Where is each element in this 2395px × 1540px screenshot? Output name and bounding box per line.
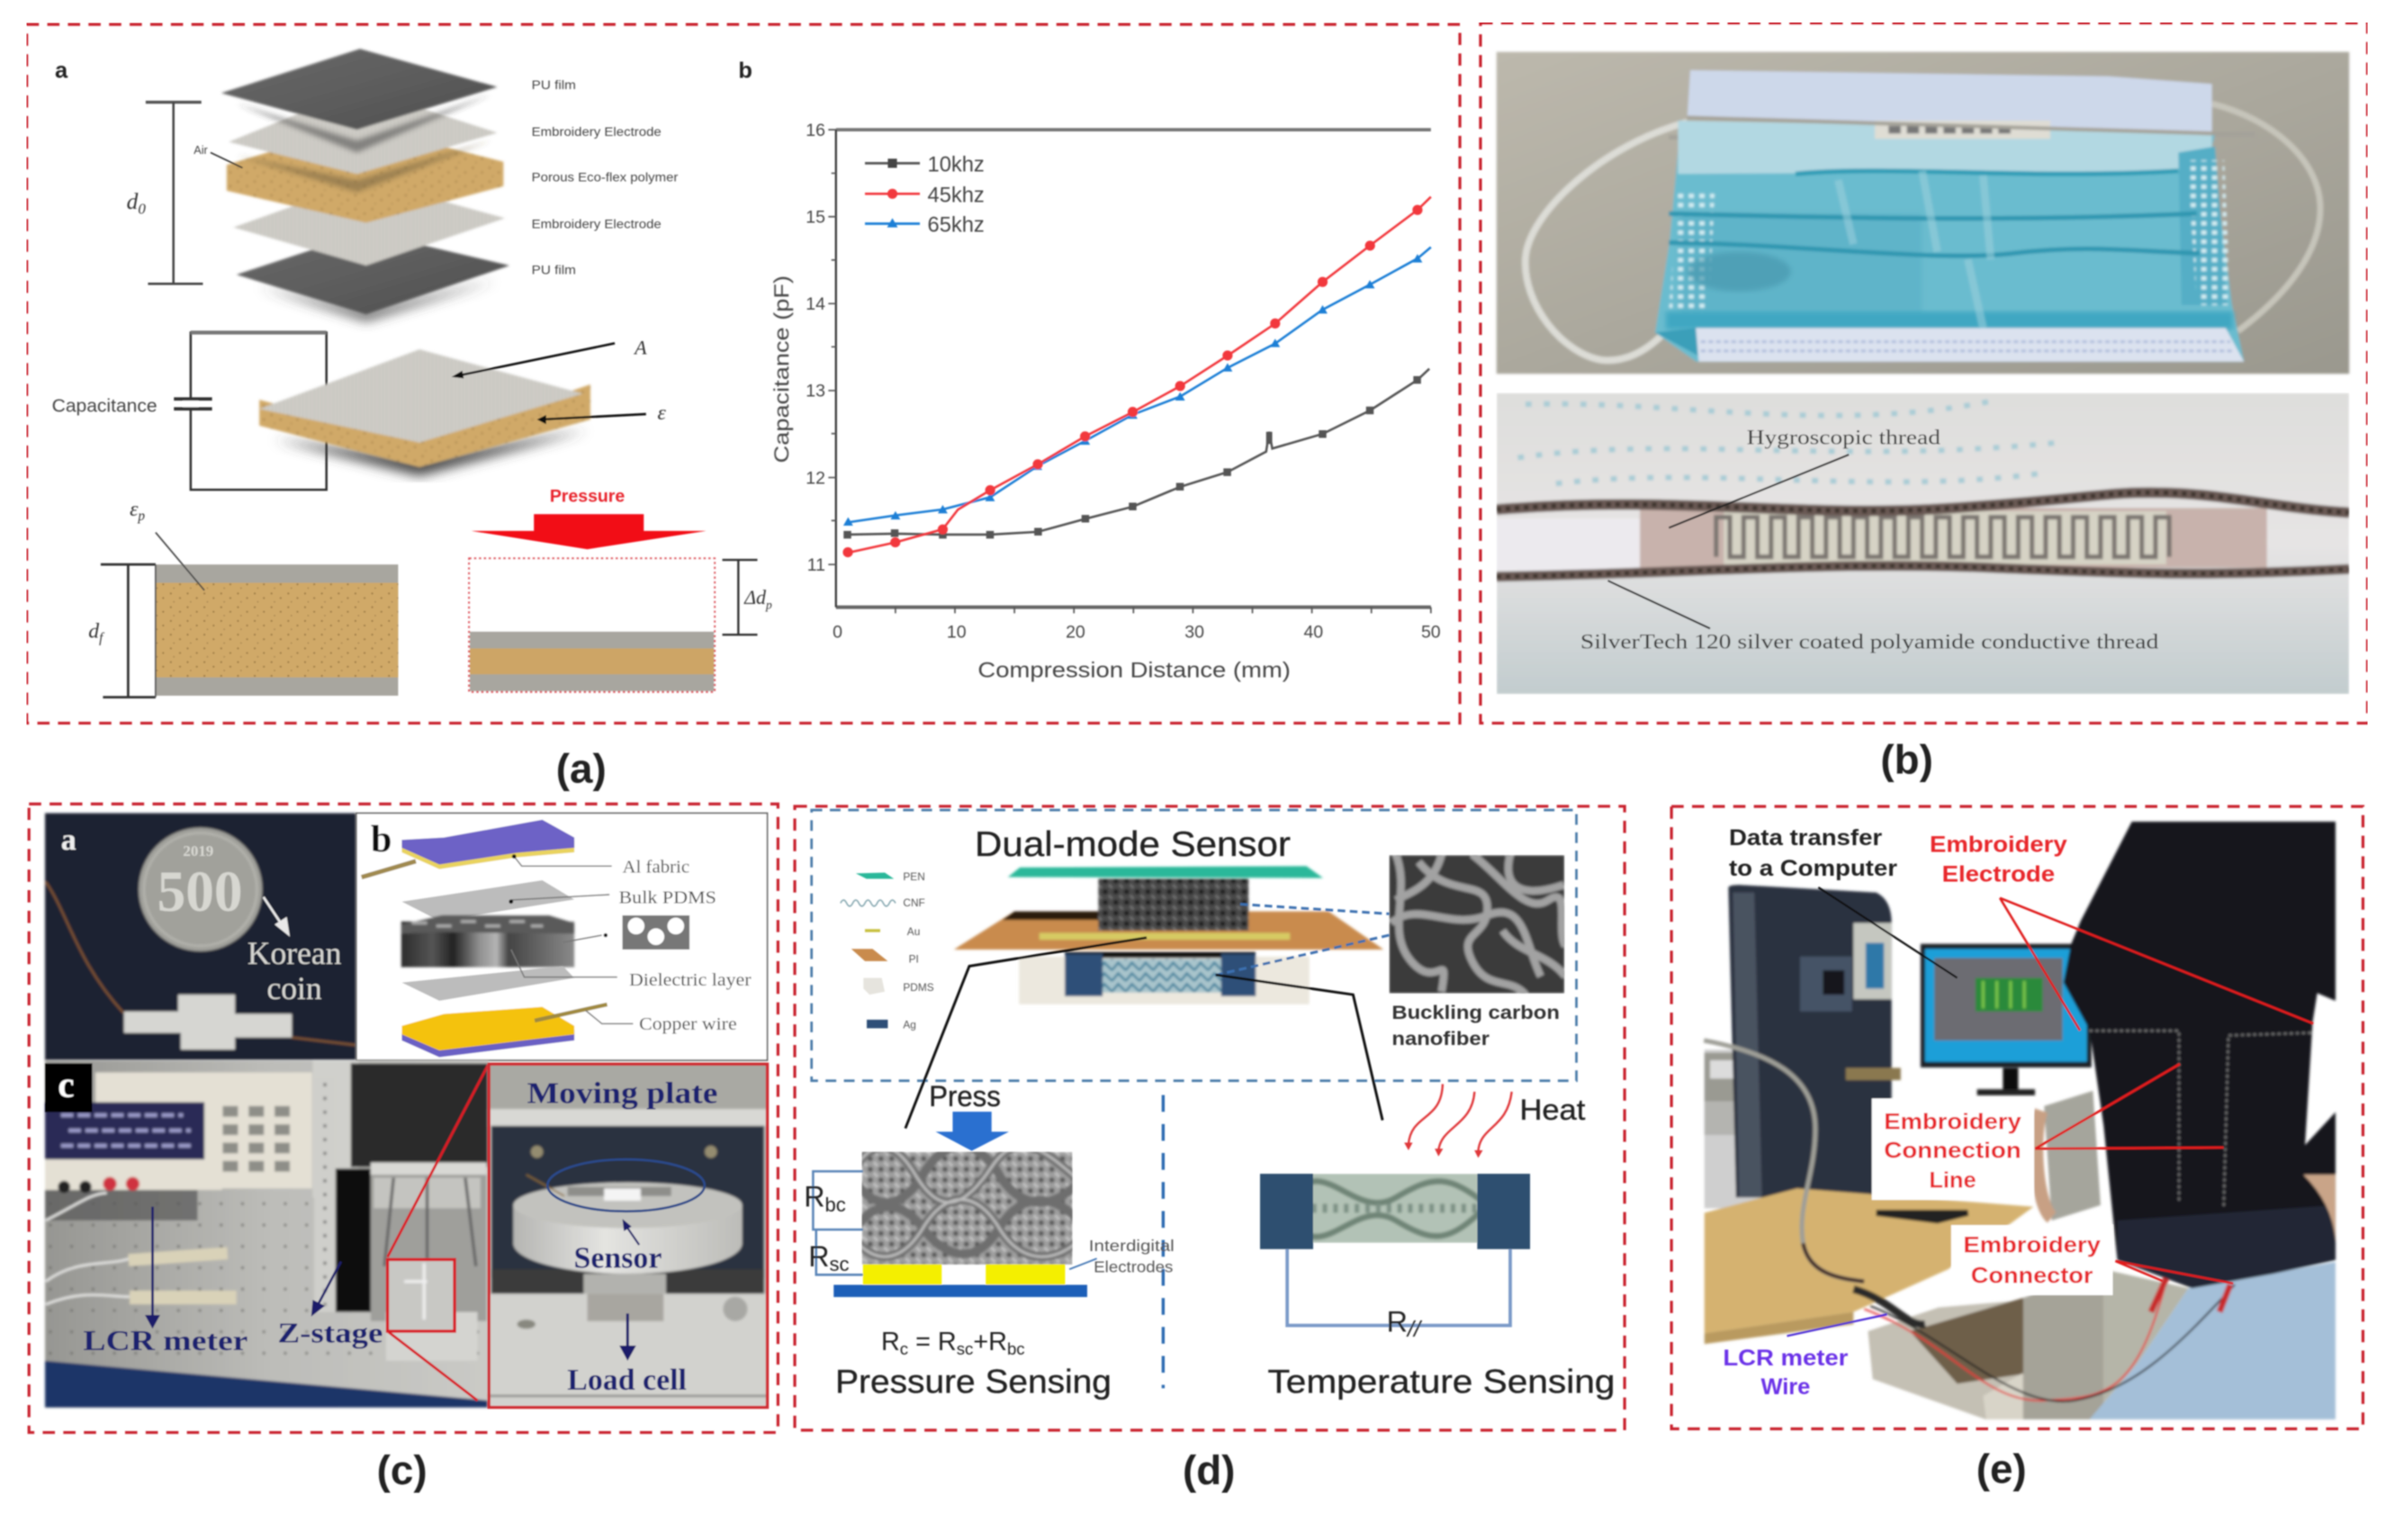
x axis tick labels — [833, 623, 1441, 643]
x axis tick labels: 0 — [833, 623, 842, 643]
icon: porous inset — [623, 915, 689, 950]
diagram: uncompressed layers: d — [88, 620, 99, 644]
photo: embroidered thread close-up — [1497, 392, 2349, 694]
photo: test setup and subject — [1704, 822, 2336, 1419]
diagram: temperature-sensing element — [1260, 1173, 1530, 1326]
label: interdigital electrodes — [1069, 1237, 1175, 1276]
label: embroidery electrode lower: Embroidery Electrode — [532, 217, 662, 230]
x axis tick labels: 30 — [1184, 623, 1204, 643]
label: sensor with arrow: Sensor — [573, 1242, 662, 1275]
label: Z-stage with arrow — [277, 1262, 383, 1349]
legend: materials: Ag — [903, 1018, 916, 1031]
x axis tick labels: 20 — [1066, 623, 1085, 643]
caption: (e): (e) — [1976, 1445, 2027, 1491]
label: sensor with arrow — [573, 1219, 662, 1275]
connectors: zoom lines — [905, 938, 1382, 1129]
coin text: 2019 — [183, 842, 213, 860]
x axis tick labels: 10 — [947, 623, 967, 643]
label box: c: c — [58, 1065, 74, 1105]
callout: hygroscopic thread: Hygroscopic thread — [1747, 426, 1941, 448]
panel: (d) dual-mode sensor — [795, 806, 1625, 1430]
arrow: area A — [452, 336, 647, 378]
diagram: uncompressed layers: ε — [130, 498, 138, 521]
y axis tick labels: 16 — [806, 121, 825, 140]
icon: capacitor block — [259, 349, 590, 476]
label: load cell with arrow: Load cell — [567, 1364, 687, 1397]
photo inset: load cell and moving plate — [488, 1063, 768, 1408]
bracket: d0 distance: 0 — [138, 200, 146, 217]
label: PU film: PU film — [532, 78, 576, 92]
axis title: capacitance: Capacitance (pF) — [770, 275, 793, 463]
coin text: 500 — [158, 860, 242, 923]
legend: materials: PDMS — [903, 981, 934, 994]
label: heat: Heat — [1519, 1094, 1585, 1126]
label: R parallel: // — [1406, 1317, 1423, 1342]
label: porous polymer: Porous Eco-flex polymer — [532, 171, 679, 185]
circuit: capacitor loop — [52, 333, 327, 490]
arrow: pressure — [472, 487, 707, 549]
caption: (d): (d) — [1183, 1447, 1235, 1493]
chart legend: 45khz — [928, 185, 985, 208]
label: moving plate: Moving plate — [527, 1076, 717, 1110]
label: interdigital electrodes: Electrodes — [1094, 1258, 1173, 1276]
label: embroidery electrode upper: Embroidery Electrode — [532, 125, 662, 139]
arrow: coin pointer — [264, 897, 290, 937]
callout: embroidery connector: Connector — [1971, 1263, 2093, 1288]
photo: mask — [1497, 52, 2349, 374]
label: LCR meter with arrow — [83, 1207, 248, 1356]
legend: materials — [841, 870, 934, 1031]
circuit: contact resistance leads — [813, 1171, 863, 1274]
connectors: blue dashes — [1212, 905, 1389, 976]
chart legend: 10khz — [928, 154, 985, 177]
callout: embroidery electrode: Electrode — [1942, 862, 2055, 887]
line chart: capacitance vs compression distance — [770, 121, 1441, 683]
label: air with leader — [194, 143, 242, 167]
label: R bc: R — [804, 1181, 824, 1213]
label: R parallel: R — [1387, 1306, 1408, 1338]
diagram: compressed layers — [469, 558, 772, 692]
label: R sc: sc — [830, 1253, 850, 1275]
label: buckling carbon nanofiber: Buckling carbon — [1391, 1003, 1560, 1023]
diagram: compressed layers: p — [765, 598, 772, 611]
photo: carbon nanofiber SEM — [1389, 854, 1565, 995]
label: LCR meter with arrow: LCR meter — [83, 1324, 248, 1356]
x axis tick labels: 50 — [1421, 623, 1441, 643]
callout: LCR meter wire: LCR meter — [1723, 1346, 1848, 1371]
label: buckling carbon nanofiber — [1391, 1003, 1560, 1049]
chart legend: 65khz — [928, 214, 985, 238]
caption: (a): (a) — [556, 746, 607, 792]
y axis tick labels — [806, 121, 825, 575]
callout: data transfer — [1729, 825, 1958, 977]
y axis tick labels: 11 — [807, 555, 825, 575]
formula: contact resistance: c — [900, 1339, 908, 1358]
label: Korean coin: coin — [266, 970, 322, 1006]
callout: LCR meter wire — [1723, 1314, 1886, 1400]
bracket: d0 distance — [127, 103, 203, 284]
arrow: permittivity — [537, 401, 667, 425]
callout: embroidery electrode — [1930, 833, 2313, 1031]
photo: sensor and Korean coin — [45, 813, 356, 1060]
y axis tick labels: 15 — [806, 208, 825, 228]
x axis tick labels: 40 — [1303, 623, 1323, 643]
label: buckling carbon nanofiber: nanofiber — [1391, 1029, 1490, 1049]
label: air with leader: Air — [194, 143, 209, 157]
formula: contact resistance: +R — [973, 1328, 1007, 1356]
arrow: area A: A — [633, 336, 647, 358]
panel: (c) pressure sensor measurement setup — [29, 804, 778, 1433]
label: pressure sensing: Pressure Sensing — [835, 1362, 1112, 1400]
title: dual-mode sensor: Dual-mode Sensor — [975, 825, 1291, 864]
formula: contact resistance: = R — [908, 1328, 957, 1356]
bracket: d0 distance: d — [127, 189, 138, 214]
label: load cell with arrow — [567, 1313, 687, 1397]
label: press: Press — [929, 1080, 1001, 1112]
legend: materials: PEN — [903, 870, 925, 883]
series: 10 kHz — [843, 369, 1429, 538]
callout: embroidery connection line: Line — [1929, 1168, 1976, 1193]
panel: (a) capacitive sensor structure and chart — [27, 24, 1460, 723]
icon: exploded layer stack — [221, 49, 509, 320]
label: R sc: R — [808, 1240, 830, 1273]
formula: contact resistance: bc — [1007, 1339, 1025, 1358]
arrows: heat — [1409, 1084, 1512, 1152]
diagram: uncompressed layers: f — [99, 631, 104, 646]
label: Korean coin: Korean — [248, 935, 342, 971]
label box: c — [45, 1063, 93, 1112]
panel: (b) smart mask with embroidered sensor — [1481, 23, 2367, 723]
formula: contact resistance: sc — [957, 1339, 973, 1358]
arrow: pressure: Pressure — [550, 487, 625, 507]
label: Copper wire: Copper wire — [639, 1014, 737, 1034]
diagram: uncompressed layers: p — [137, 509, 145, 524]
arrow: permittivity: ε — [658, 401, 667, 425]
callout: embroidery connection line: Connection — [1884, 1138, 2021, 1163]
series: 45 kHz — [842, 197, 1431, 557]
callout: data transfer: Data transfer — [1729, 825, 1882, 851]
label: sub-panel b: b — [738, 58, 752, 83]
diagram: sensor stack — [954, 866, 1383, 1004]
circuit: capacitor loop: Capacitance — [52, 397, 158, 417]
callout: embroidery connector — [1951, 1225, 2233, 1295]
diagram: compressed layers: Δd — [744, 586, 766, 608]
caption: (c): (c) — [377, 1447, 428, 1493]
diagram: pressure-sensing carbon nanofiber — [860, 1150, 1073, 1265]
callout: embroidery connection line — [1872, 1064, 2224, 1200]
y axis tick labels: 13 — [806, 382, 825, 401]
legend: materials: Au — [907, 925, 920, 938]
callout: hygroscopic thread — [1669, 426, 1941, 527]
label: sub-panel a: a — [55, 58, 68, 83]
label: Z-stage with arrow: Z-stage — [277, 1317, 383, 1349]
y axis tick labels: 12 — [806, 468, 825, 488]
callout: LCR meter wire: Wire — [1760, 1374, 1810, 1400]
callout: conductive thread — [1580, 581, 2158, 653]
formula: contact resistance: R — [881, 1328, 900, 1356]
callout: embroidery connector: Embroidery — [1963, 1233, 2101, 1258]
callout: data transfer: to a Computer — [1729, 856, 1897, 881]
y axis tick labels: 14 — [806, 294, 825, 314]
axis title: compression distance: Compression Distance (mm) — [977, 660, 1291, 683]
arrowheads: heat — [1404, 1143, 1482, 1157]
callout: embroidery electrode: Embroidery — [1930, 833, 2067, 858]
divider: vertical — [1162, 1095, 1164, 1388]
label: Bulk PDMS: Bulk PDMS — [618, 887, 716, 907]
diagram: sensor layers: b — [371, 818, 392, 860]
panel: (e) embroidered sensor on garment — [1671, 806, 2363, 1428]
chart legend — [865, 154, 985, 238]
label: temperature sensing: Temperature Sensing — [1267, 1362, 1615, 1400]
diagram: sensor layers — [356, 813, 768, 1060]
label: Korean coin — [248, 935, 342, 1006]
diagram: uncompressed layers — [88, 498, 398, 698]
label: interdigital electrodes: Interdigital — [1089, 1237, 1175, 1255]
legend: materials: PI — [909, 953, 919, 966]
label: Al fabric: Al fabric — [623, 858, 689, 878]
legend: materials: CNF — [903, 896, 925, 909]
divider: dual-mode frame — [812, 810, 1577, 1081]
annotation: sensor ellipse — [547, 1159, 705, 1211]
photo: LCR meter and z-stage — [45, 1060, 489, 1408]
callout: embroidery connection line: Embroidery — [1884, 1109, 2021, 1134]
inset: red zoom box — [388, 1065, 488, 1400]
label: a: a — [61, 824, 77, 857]
caption: (b): (b) — [1880, 736, 1933, 782]
electrodes: yellow pads and base — [833, 1265, 1087, 1297]
label: R bc: bc — [824, 1193, 846, 1216]
series: 65 kHz — [843, 248, 1431, 526]
label: Dielectric layer: Dielectric layer — [629, 970, 752, 990]
label: PU film lower: PU film — [532, 263, 576, 276]
callout: conductive thread: SilverTech 120 silver coated polyamide conductive thread — [1580, 630, 2158, 653]
arrow: press — [935, 1112, 1009, 1151]
